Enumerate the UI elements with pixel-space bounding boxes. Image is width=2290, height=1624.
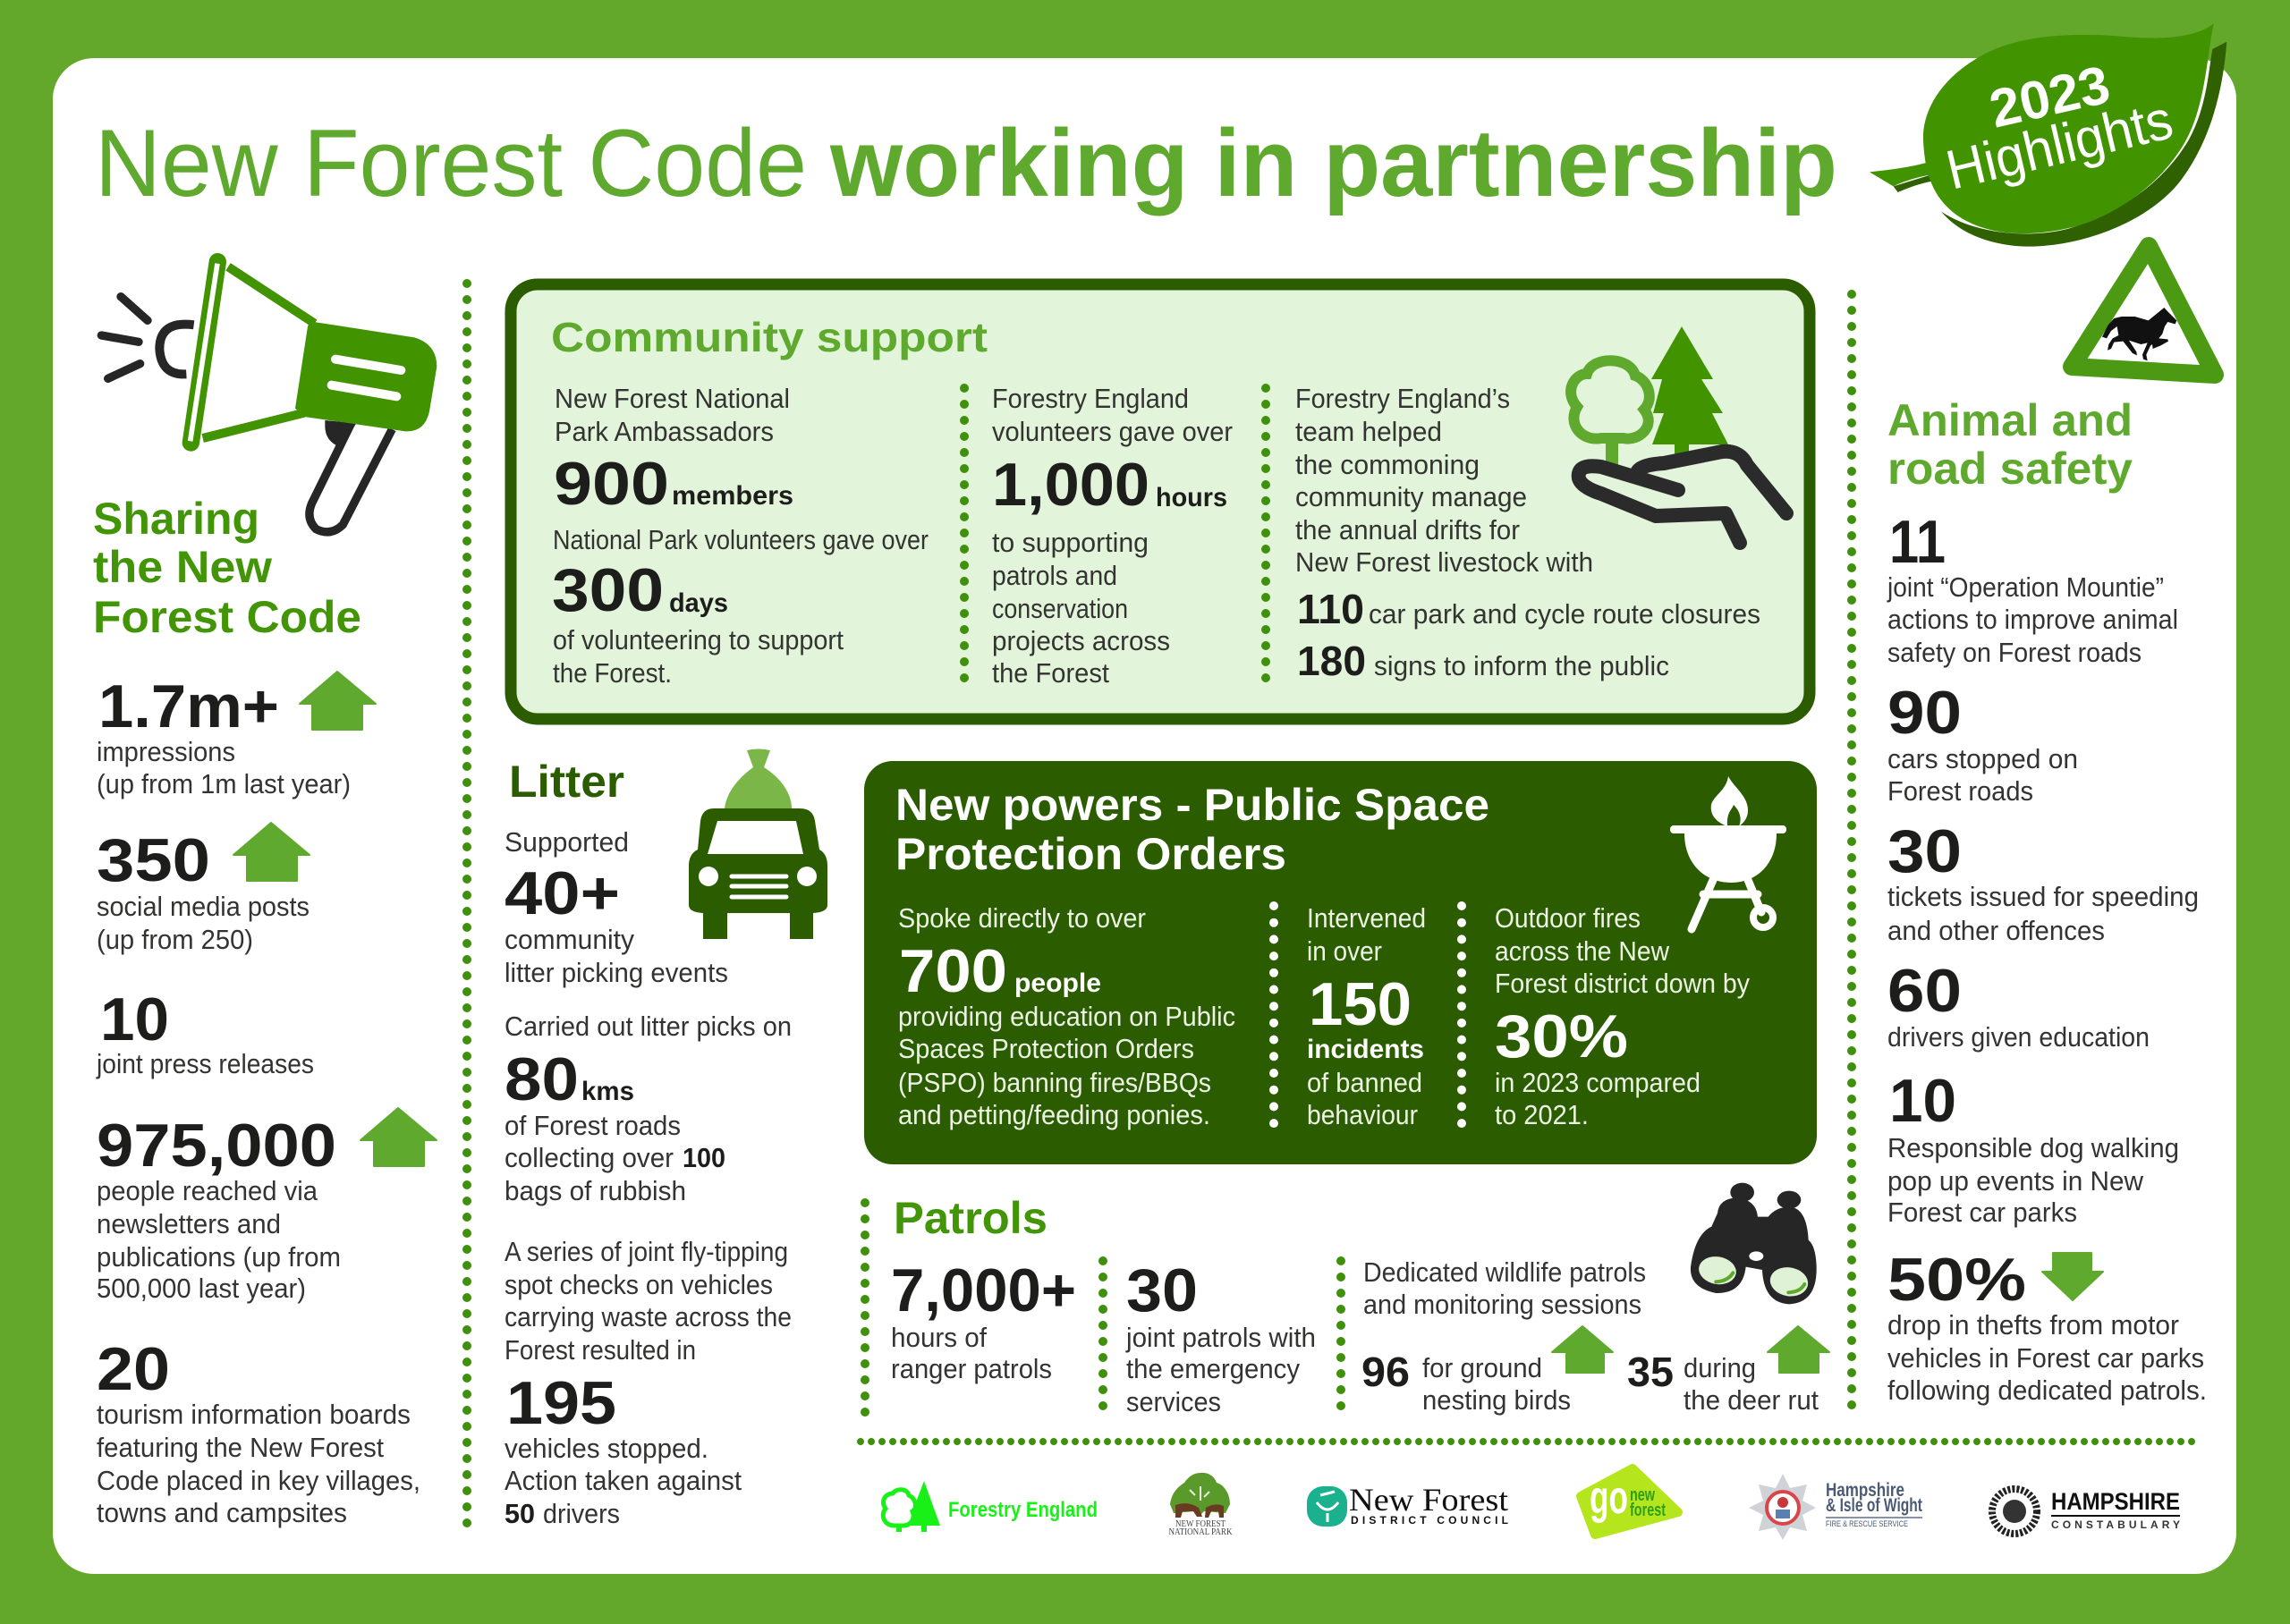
stat: 20 tourism information boards: featuring the New Forest — [97, 1432, 384, 1463]
column: outdoor fires down 30%: Outdoor fires — [1495, 902, 1641, 934]
column: spoke to 700 people: 700 — [899, 937, 1007, 1005]
stat: 11 Operation Mountie: safety on Forest roads — [1887, 637, 2142, 668]
stat: 40+ litter picking events: litter picking events — [505, 957, 728, 988]
column: spoke to 700 people — [898, 902, 1235, 1130]
stat: 195 vehicles stopped — [505, 1236, 792, 1529]
stat: 30 tickets issued: tickets issued for speeding — [1887, 881, 2199, 912]
heading: animal and road safety — [1887, 395, 2133, 494]
column: Forestry England volunteers: Forestry England — [992, 383, 1189, 414]
panel: patrols — [865, 1183, 1829, 1417]
stat: 350 social media posts: (up from 250) — [97, 924, 253, 955]
stat: 90 cars stopped: Forest roads — [1887, 775, 2033, 807]
stat: 1.7m+ impressions: (up from 1m last year) — [97, 768, 351, 799]
stat: 1.7m+ impressions — [97, 672, 351, 799]
icon: megaphone — [101, 262, 437, 532]
logo: Hampshire Constabulary: CONSTABULARY — [2051, 1518, 2180, 1531]
heading: Sharing the New Forest Code: Sharing — [93, 494, 259, 544]
column: spoke to 700 people: providing education on Public — [898, 1001, 1235, 1032]
logo: New Forest District Council — [1307, 1482, 1508, 1527]
column: Forestry England volunteers: 1,000 — [992, 451, 1149, 519]
icon: horse warning sign — [2072, 246, 2215, 375]
heading: Sharing the New Forest Code — [93, 494, 361, 642]
column: spoke to 700 people: and petting/feeding ponies. — [898, 1099, 1210, 1130]
stat: 80 kms litter picks: bags of rubbish — [505, 1175, 686, 1206]
column: 150 incidents: incidents — [1307, 1035, 1424, 1064]
column: Forestry England volunteers: projects across — [992, 625, 1170, 656]
logo: New Forest District Council: DISTRICT COUNCIL — [1351, 1514, 1508, 1527]
stat: 350 social media posts: social media posts — [97, 891, 310, 922]
stat: 20 tourism information boards: 20 — [97, 1335, 170, 1403]
logo: New Forest National Park: NATIONAL PARK — [1168, 1527, 1233, 1537]
stat: 195 vehicles stopped: A series of joint fly-tipping — [505, 1236, 788, 1267]
stat: 11 Operation Mountie: 11 — [1889, 508, 1946, 576]
stat: 20 tourism information boards: tourism information boards — [97, 1399, 411, 1430]
heading: new powers: New powers - Public Space — [895, 780, 1489, 830]
icon: binoculars — [1691, 1183, 1817, 1304]
column: outdoor fires down 30% — [1495, 902, 1750, 1130]
logo: Hampshire and Isle of Wight Fire and Rescue — [1749, 1474, 1922, 1540]
column: outdoor fires down 30%: in 2023 compared — [1495, 1067, 1701, 1098]
column: 150 incidents: in over — [1307, 935, 1382, 967]
logo: Forestry England — [883, 1481, 1098, 1532]
column: 150 incidents: Intervened — [1307, 902, 1426, 934]
stat: 30 joint patrols: 30 — [1126, 1256, 1198, 1324]
stat: 195 vehicles stopped: 50 — [505, 1498, 535, 1529]
stat: 40+ litter picking events: community — [505, 924, 634, 955]
stat: 90 cars stopped: cars stopped on — [1887, 743, 2078, 774]
column: commoning community drifts: 110 — [1297, 586, 1364, 632]
stat: 10 joint press releases: joint press releases — [96, 1048, 314, 1079]
column: ambassadors and volunteers: members — [672, 481, 793, 511]
column: commoning community drifts: 180 — [1297, 638, 1366, 684]
column: commoning community drifts: community manage — [1295, 481, 1527, 512]
icon: up arrow — [233, 823, 310, 881]
heading: community support: Community support — [551, 314, 988, 360]
stat: 30 tickets issued: 30 — [1887, 817, 1962, 885]
leaf badge: 2023 Highlights: 2023 — [1984, 54, 2116, 140]
stat: 50% drop in thefts: 50% — [1887, 1246, 2026, 1314]
column: outdoor fires down 30%: to 2021. — [1495, 1099, 1589, 1130]
stat: 80 kms litter picks: collecting over — [505, 1142, 674, 1173]
stat: 195 vehicles stopped: Action taken against — [505, 1465, 742, 1496]
stat: 50% drop in thefts: vehicles in Forest car parks — [1887, 1342, 2204, 1374]
stat: 35 during deer rut: 35 — [1627, 1349, 1674, 1395]
stat: 40+ litter picking events: 40+ — [505, 859, 620, 927]
heading: new powers — [895, 780, 1489, 879]
heading: new powers: Protection Orders — [895, 829, 1286, 879]
stat: 96 ground nesting birds — [1361, 1349, 1571, 1416]
stat: 10 dog walking events: 10 — [1889, 1067, 1956, 1135]
column: commoning community drifts: the annual drifts for — [1295, 514, 1520, 546]
stat: 30 tickets issued — [1887, 817, 2199, 946]
logo: go new forest: forest — [1630, 1501, 1666, 1520]
stat: 50% drop in thefts: following dedicated patrols. — [1887, 1374, 2207, 1406]
stat: 50% drop in thefts — [1887, 1246, 2207, 1406]
column: Forestry England volunteers: patrols and — [992, 560, 1117, 591]
stat: 975,000 people reached: 975,000 — [97, 1112, 336, 1180]
column: ambassadors and volunteers — [552, 383, 929, 689]
stat: 30 joint patrols: the emergency — [1126, 1353, 1300, 1384]
logos row — [883, 1468, 2180, 1540]
stat: 35 during deer rut: during — [1684, 1352, 1756, 1383]
stat: 7,000+ ranger patrol hours: ranger patrols — [891, 1353, 1052, 1384]
column: Forestry England volunteers: volunteers gave over — [992, 416, 1233, 447]
heading: Sharing the New Forest Code: the New — [93, 542, 272, 592]
column: ambassadors and volunteers: 300 — [552, 556, 664, 624]
stat: 10 dog walking events: Forest car parks — [1887, 1197, 2077, 1228]
stat: 975,000 people reached: publications (up from — [97, 1241, 341, 1273]
stat: 30 joint patrols: services — [1126, 1386, 1221, 1417]
text: dedicated wildlife patrols: Dedicated wildlife patrols — [1363, 1256, 1646, 1288]
stat: 30 joint patrols: joint patrols with — [1125, 1322, 1316, 1353]
panel: community support — [511, 284, 1810, 719]
stat: 10 joint press releases — [96, 985, 314, 1079]
stat: 350 social media posts — [97, 826, 310, 955]
title: working in partnership — [829, 109, 1837, 216]
panel: new powers PSPO — [864, 761, 1817, 1164]
stat: 11 Operation Mountie — [1887, 508, 2178, 668]
column: ambassadors and volunteers: of volunteering to support — [553, 624, 844, 656]
stat: 350 social media posts: 350 — [97, 826, 210, 894]
title — [95, 109, 1837, 216]
stat: 90 cars stopped: 90 — [1887, 679, 1962, 747]
stat: 20 tourism information boards — [97, 1335, 420, 1528]
column: outdoor fires down 30%: across the New — [1495, 935, 1670, 967]
stat: 60 drivers given education: 60 — [1887, 957, 1962, 1025]
logo: Hampshire Constabulary — [1992, 1488, 2180, 1534]
column: commoning community drifts — [1295, 383, 1760, 684]
column: spoke to 700 people: (PSPO) banning fires/BBQs — [898, 1067, 1211, 1098]
stat: 80 kms litter picks: 80 — [505, 1045, 579, 1113]
text: dedicated wildlife patrols — [1363, 1256, 1646, 1320]
logo: go new forest: go — [1590, 1472, 1628, 1524]
logo: go new forest — [1581, 1468, 1678, 1535]
column: commoning community drifts: signs to inform the public — [1374, 650, 1669, 681]
stat: 11 Operation Mountie: joint “Operation Mountie” — [1887, 571, 2164, 603]
logo: Hampshire and Isle of Wight Fire and Rescue: Hampshire — [1826, 1480, 1904, 1501]
stat: 60 drivers given education — [1887, 957, 2150, 1053]
stat: 7,000+ ranger patrol hours: hours of — [891, 1322, 987, 1353]
leaf badge: 2023 Highlights: Highlights — [1940, 89, 2178, 202]
column: spoke to 700 people: Spoke directly to over — [898, 902, 1146, 934]
stat: 96 ground nesting birds: 96 — [1361, 1349, 1410, 1395]
logo: New Forest National Park — [1168, 1473, 1233, 1537]
stat: 195 vehicles stopped: Forest resulted in — [505, 1334, 696, 1366]
stat: 7,000+ ranger patrol hours — [891, 1256, 1076, 1384]
stat: 90 cars stopped — [1887, 679, 2078, 807]
heading: animal and road safety: Animal and — [1887, 395, 2133, 445]
column: outdoor fires down 30%: 30% — [1495, 1002, 1628, 1070]
icon: up arrow — [1552, 1326, 1613, 1373]
column: ambassadors and volunteers: 900 — [554, 450, 669, 518]
column: outdoor fires down 30%: Forest district down by — [1495, 968, 1750, 999]
column: commoning community drifts: the commoning — [1295, 449, 1480, 480]
column: commoning community drifts: car park and cycle route closures — [1369, 598, 1760, 630]
column: Forestry England volunteers: the Forest — [992, 657, 1109, 689]
column: 150 incidents: of banned — [1307, 1067, 1422, 1098]
stat: 195 vehicles stopped: vehicles stopped. — [505, 1433, 708, 1464]
stat: 30 tickets issued: and other offences — [1887, 915, 2105, 946]
column: commoning community drifts: New Forest livestock with — [1295, 546, 1593, 578]
stat: 195 vehicles stopped: 195 — [506, 1369, 616, 1437]
stat: 30 joint patrols — [1125, 1256, 1316, 1417]
stat: 975,000 people reached — [97, 1112, 341, 1304]
column: Forestry England volunteers: conservation — [992, 593, 1128, 624]
stat: 50% drop in thefts: drop in thefts from motor — [1887, 1309, 2179, 1341]
stat: 10 dog walking events — [1887, 1067, 2179, 1228]
logo: Forestry England: Forestry England — [948, 1498, 1098, 1522]
column: ambassadors and volunteers: Park Ambassadors — [555, 416, 774, 447]
stat: 96 ground nesting birds: nesting birds — [1422, 1384, 1571, 1416]
stat: 35 during deer rut: the deer rut — [1684, 1384, 1819, 1416]
column: ambassadors and volunteers: New Forest National — [555, 383, 790, 414]
stat: 20 tourism information boards: Code placed in key villages, — [97, 1465, 420, 1496]
heading: litter: Litter — [509, 757, 624, 807]
stat: 80 kms litter picks: kms — [581, 1077, 634, 1106]
column: 150 incidents — [1307, 902, 1426, 1130]
stat: 1.7m+ impressions: 1.7m+ — [98, 672, 279, 740]
column: 150 incidents: behaviour — [1307, 1099, 1418, 1130]
heading: Sharing the New Forest Code: Forest Code — [93, 592, 361, 642]
icon: barbecue — [1670, 776, 1786, 929]
column: ambassadors and volunteers: the Forest. — [553, 657, 672, 689]
stat: 80 kms litter picks — [505, 1011, 792, 1206]
heading: patrols: Patrols — [894, 1193, 1047, 1243]
stat: 195 vehicles stopped: spot checks on vehicles — [505, 1269, 773, 1300]
stat: 975,000 people reached: 500,000 last year) — [97, 1273, 306, 1304]
icon: car with rubbish bag — [689, 749, 827, 939]
column: commoning community drifts: team helped — [1295, 416, 1442, 447]
heading: animal and road safety: road safety — [1887, 444, 2133, 494]
stat: 975,000 people reached: newsletters and — [97, 1208, 281, 1239]
stat: 80 kms litter picks: 100 — [683, 1142, 725, 1173]
leaf badge: 2023 Highlights — [1870, 23, 2226, 247]
title: New Forest Code — [95, 109, 807, 216]
logo: go new forest: new — [1630, 1485, 1655, 1505]
column: Forestry England volunteers: to supporting — [992, 527, 1149, 558]
stat: 96 ground nesting birds: for ground — [1422, 1352, 1542, 1383]
column: commoning community drifts: Forestry England’s — [1295, 383, 1510, 414]
stat: 80 kms litter picks: of Forest roads — [505, 1110, 681, 1141]
stat: 20 tourism information boards: towns and campsites — [97, 1497, 347, 1528]
stat: 195 vehicles stopped: drivers — [543, 1498, 620, 1529]
stat: 7,000+ ranger patrol hours: 7,000+ — [891, 1256, 1076, 1324]
stat: 1.7m+ impressions: impressions — [97, 736, 235, 767]
stat: 60 drivers given education: drivers given education — [1887, 1021, 2150, 1053]
icon: up arrow — [1768, 1326, 1829, 1373]
panel: animal and road safety — [1887, 246, 2215, 1406]
stat: 10 dog walking events: Responsible dog walking — [1887, 1132, 2179, 1163]
column: Forestry England volunteers — [992, 383, 1233, 689]
stat: 40+ litter picking events — [505, 826, 728, 988]
icon: trees in hand — [1571, 326, 1786, 543]
panel: litter — [505, 749, 827, 1529]
stat: 10 joint press releases: 10 — [100, 985, 169, 1053]
icon: up arrow — [360, 1108, 437, 1166]
icon: down arrow — [2042, 1253, 2103, 1300]
column: ambassadors and volunteers: National Park volunteers gave over — [553, 524, 929, 555]
icon: up arrow — [300, 672, 376, 730]
stat: 40+ litter picking events: Supported — [505, 826, 629, 858]
stat: 80 kms litter picks: Carried out litter picks on — [505, 1011, 792, 1042]
logo: New Forest National Park: NEW FOREST — [1175, 1519, 1226, 1529]
stat: 195 vehicles stopped: carrying waste across the — [505, 1301, 792, 1332]
column: 150 incidents: 150 — [1309, 970, 1412, 1038]
stat: 975,000 people reached: people reached via — [97, 1175, 318, 1206]
column: spoke to 700 people: Spaces Protection Orders — [898, 1033, 1194, 1064]
logo: Hampshire and Isle of Wight Fire and Rescue: FIRE & RESCUE SERVICE — [1826, 1519, 1908, 1528]
logo: Hampshire Constabulary: HAMPSHIRE — [2051, 1488, 2180, 1515]
stat: 35 during deer rut — [1627, 1349, 1819, 1416]
column: ambassadors and volunteers: days — [669, 588, 728, 618]
logo: New Forest District Council: New Forest — [1349, 1482, 1508, 1518]
stat: 10 dog walking events: pop up events in New — [1887, 1165, 2144, 1197]
text: dedicated wildlife patrols: and monitoring sessions — [1363, 1289, 1641, 1320]
stat: 11 Operation Mountie: actions to improve animal — [1887, 604, 2178, 635]
column: spoke to 700 people: people — [1014, 968, 1101, 998]
logo: Hampshire and Isle of Wight Fire and Rescue: & Isle of Wight — [1826, 1495, 1922, 1516]
column: Forestry England volunteers: hours — [1156, 483, 1227, 512]
